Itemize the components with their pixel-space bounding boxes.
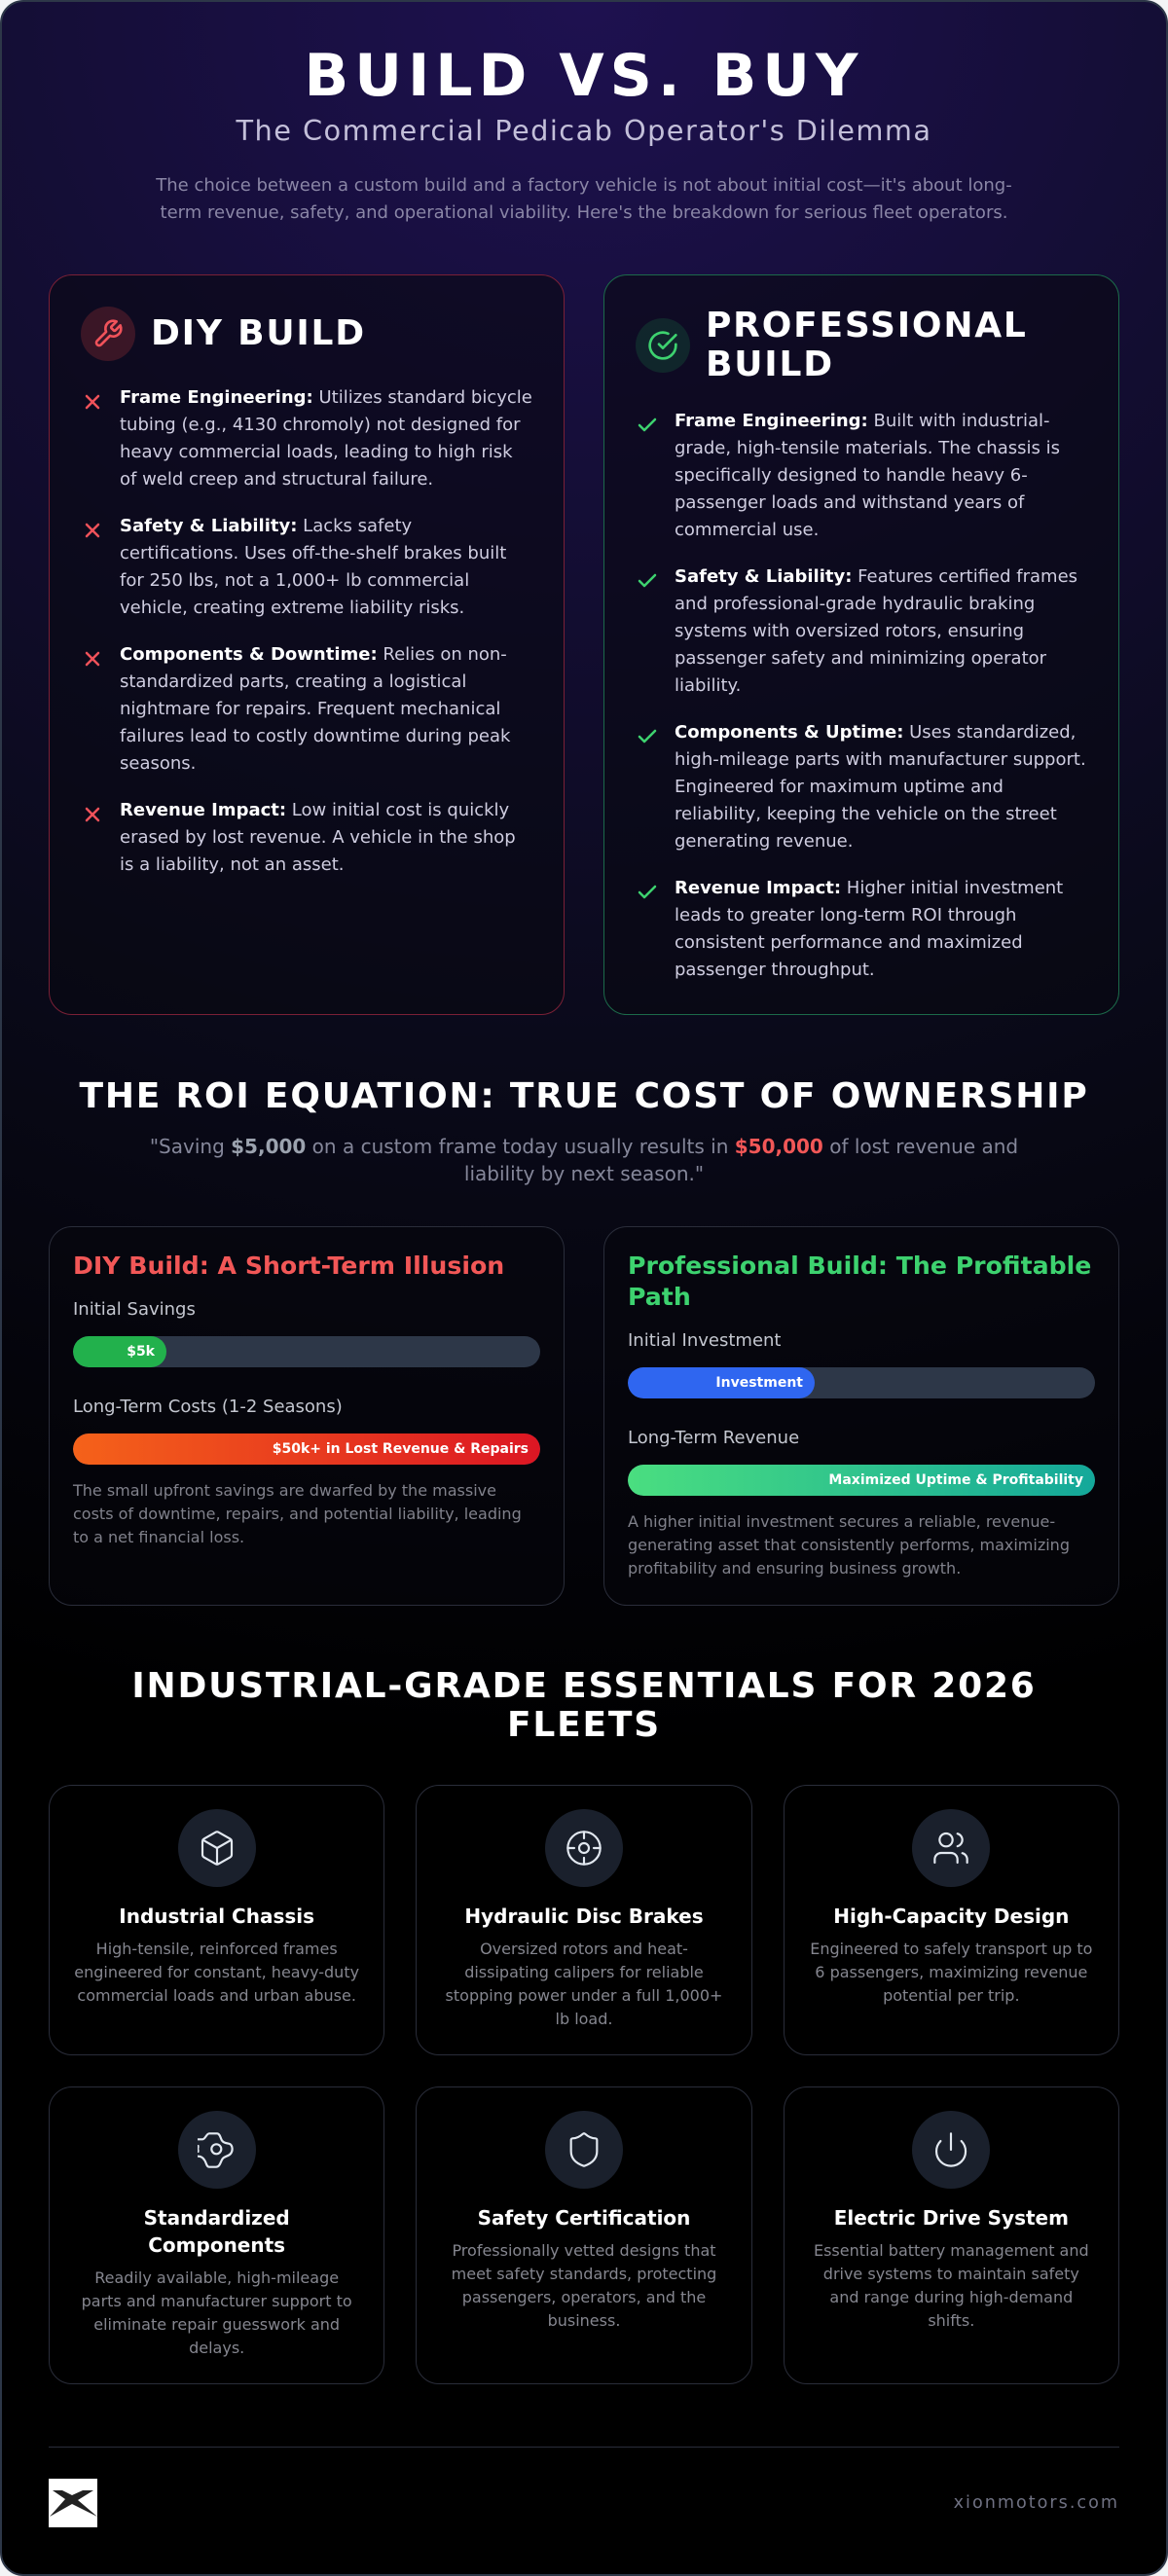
- item: frame engineering: Frame Engineering: Utilizes standard bicycle tubing (e.g., 4130 chromoly) not designed for heavy commercial loads, leading to high risk of weld creep and structural failure.: [120, 387, 532, 490]
- description: Engineered to safely transport up to 6 passengers, maximizing revenue potential per trip.: [810, 1940, 1092, 2005]
- panel: high-capacity design: [784, 1785, 1119, 2055]
- bar: long-term costs: $50k+ in Lost Revenue & Repairs: [273, 1441, 529, 1457]
- item: components and uptime: Components & Uptime: Uses standardized, high-mileage parts with manufacturer support. Engineered for maximum uptime and reliability, keeping the vehicle on the street generating revenue.: [675, 722, 1086, 852]
- label: initial savings: Initial Savings: [73, 1299, 196, 1320]
- section heading: ROI: THE ROI EQUATION: TRUE COST OF OWNERSHIP: [79, 1076, 1089, 1116]
- bar: initial investment: [628, 1367, 1095, 1398]
- item: revenue impact: Revenue Impact: Higher initial investment leads to greater long-term ROI through consistent performance and maximized passenger throughput.: [675, 878, 1063, 980]
- panel: standardized components: [49, 2086, 384, 2384]
- icon: box: [178, 1809, 256, 1887]
- bar: initial savings: $5k: [127, 1344, 155, 1360]
- icon: power: [912, 2111, 990, 2189]
- description: Professionally vetted designs that meet safety standards, protecting passengers, operators, and the business.: [452, 2241, 716, 2330]
- label: long-term costs: Long-Term Costs (1-2 Seasons): [73, 1397, 343, 1417]
- panel: DIY build: [49, 274, 565, 1015]
- icon: brake disc: [545, 1809, 623, 1887]
- description: High-tensile, reinforced frames engineered for constant, heavy-duty commercial loads and urban abuse.: [74, 1940, 359, 2005]
- bar: initial savings: [73, 1336, 540, 1367]
- professional ROI title: Professional Build: The Profitable Path: [628, 1252, 1091, 1311]
- panel: safety certification: [416, 2086, 752, 2384]
- DIY ROI title: DIY Build: A Short-Term Illusion: [73, 1252, 504, 1280]
- logo: [49, 2479, 97, 2527]
- panel: industrial chassis: [49, 1785, 384, 2055]
- icon: shield: [545, 2111, 623, 2189]
- panel: professional ROI: [603, 1226, 1119, 1606]
- subtitle: The Commercial Pedicab Operator's Dilemma: [236, 114, 932, 147]
- description: Essential battery management and drive systems to maintain safety and range during high-demand shifts.: [814, 2241, 1089, 2330]
- bar: initial investment: Investment: [715, 1375, 803, 1391]
- title: Safety Certification: [478, 2206, 690, 2230]
- title: Hydraulic Disc Brakes: [464, 1905, 704, 1928]
- panel: hydraulic disc brakes: [416, 1785, 752, 2055]
- title: Industrial Chassis: [119, 1905, 314, 1928]
- label: long-term revenue: Long-Term Revenue: [628, 1428, 799, 1448]
- icon: wrench: [81, 307, 135, 361]
- icon: gear: [178, 2111, 256, 2189]
- bar: long-term costs: [73, 1433, 540, 1465]
- DIY heading: DIY BUILD: [151, 313, 366, 353]
- bar: long-term revenue: Maximized Uptime & Profitability: [828, 1472, 1083, 1488]
- item: safety and liability: Safety & Liability: Features certified frames and professional-grade hydraulic braking systems with oversized rotors, ensuring passenger safety and minimizing operator liability.: [675, 566, 1077, 696]
- item: revenue impact: Revenue Impact: Low initial cost is quickly erased by lost revenue. A vehicle in the shop is a liability, not an asset.: [120, 800, 516, 875]
- icon: circle check: [636, 318, 690, 373]
- ROI quote: "Saving $5,000 on a custom frame today usually results in $50,000 of lost revenue and liability by next season.": [150, 1135, 1018, 1185]
- panel: electric drive system: [784, 2086, 1119, 2384]
- panel: professional build: [603, 274, 1119, 1015]
- item: frame engineering: Frame Engineering: Built with industrial-grade, high-tensile materials. The chassis is specifically designed to handle heavy 6-passenger loads and withstand years of commercial use.: [675, 411, 1060, 540]
- label: initial investment: Initial Investment: [628, 1330, 781, 1351]
- professional ROI description: A higher initial investment secures a reliable, revenue-generating asset that consistently performs, maximizing profitability and ensuring business growth.: [628, 1512, 1070, 1578]
- item: safety and liability: Safety & Liability: Lacks safety certifications. Uses off-the-shelf brakes built for 250 lbs, not a 1,000+ lb commercial vehicle, creating extreme liability risks.: [120, 516, 506, 618]
- description: Oversized rotors and heat-dissipating calipers for reliable stopping power under a full 1,000+ lb load.: [446, 1940, 722, 2028]
- section heading: essentials: INDUSTRIAL-GRADE ESSENTIALS FOR 2026 FLEETS: [131, 1666, 1037, 1745]
- description: Readily available, high-mileage parts and manufacturer support to eliminate repair guesswork and delays.: [82, 2268, 352, 2357]
- intro paragraph: The choice between a custom build and a factory vehicle is not about initial cost—it's about long-term revenue, safety, and operational viability. Here's the breakdown for serious fleet operators.: [156, 175, 1012, 223]
- bar: long-term revenue: [628, 1465, 1095, 1496]
- item: components and downtime: Components & Downtime: Relies on non-standardized parts, creating a logistical nightmare for repairs. Frequent mechanical failures lead to costly downtime during peak seasons.: [120, 644, 510, 774]
- title: High-Capacity Design: [833, 1905, 1069, 1928]
- DIY heading: [81, 307, 366, 361]
- DIY ROI description: The small upfront savings are dwarfed by the massive costs of downtime, repairs, and potential liability, leading to a net financial loss.: [73, 1481, 522, 1546]
- title: Electric Drive System: [834, 2206, 1069, 2230]
- panel: DIY ROI: [49, 1226, 565, 1606]
- website: xionmotors.com: [954, 2493, 1119, 2513]
- icon: users: [912, 1809, 990, 1887]
- title: Standardized Components: [144, 2206, 290, 2257]
- title: BUILD VS. BUY: [305, 42, 863, 110]
- professional heading: PROFESSIONAL BUILD: [706, 306, 1028, 384]
